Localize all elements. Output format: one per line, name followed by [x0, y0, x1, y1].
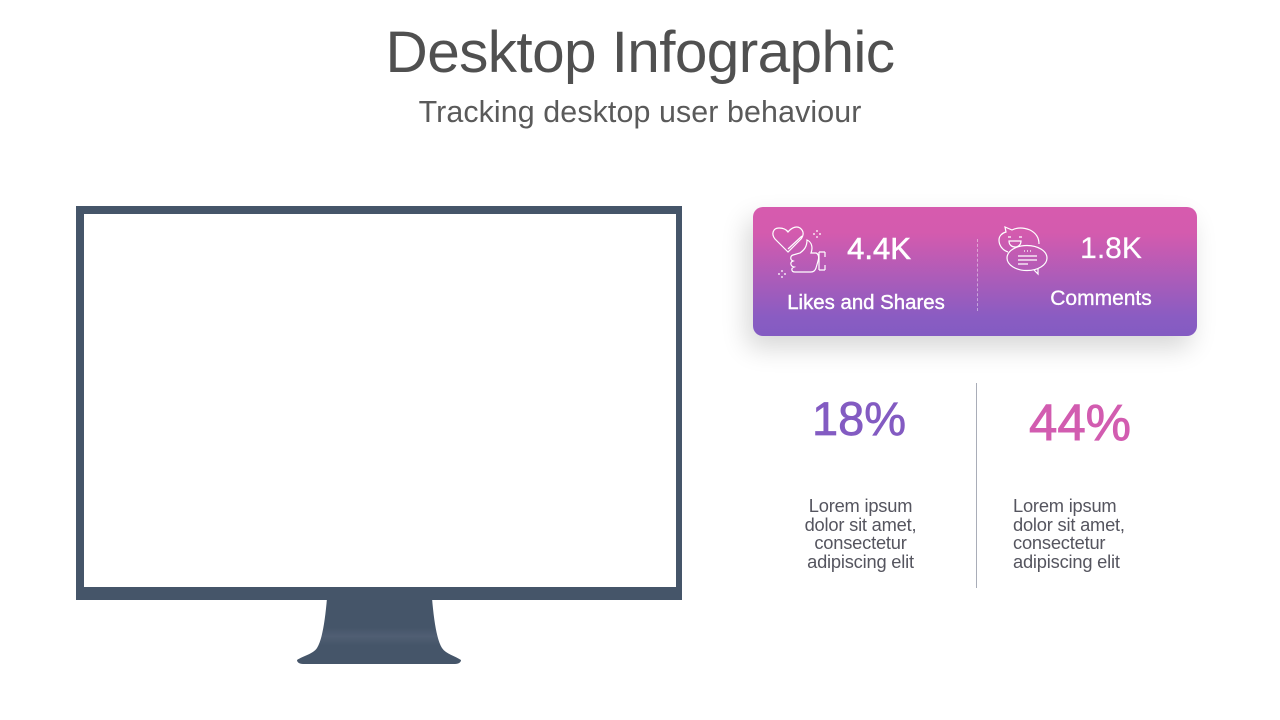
- stat: 18%: 18%: [812, 392, 906, 445]
- label: Comments: Comments: [1050, 287, 1152, 310]
- text block: left: dolor sit amet,: [805, 514, 916, 534]
- text block: right: consectetur: [1013, 532, 1105, 553]
- panel: social stats: [753, 207, 1197, 336]
- icon: heart and thumbs up: [772, 226, 826, 278]
- text block: right: adipiscing elit: [1013, 550, 1120, 572]
- vertical divider: [976, 383, 977, 588]
- text block: left: consectetur: [814, 532, 907, 553]
- text block: left: [805, 495, 916, 572]
- label: Likes and Shares: Likes and Shares: [787, 292, 945, 314]
- divider: [977, 239, 978, 311]
- title: Desktop Infographic: [386, 20, 894, 85]
- text block: right: [1013, 495, 1125, 572]
- text block: right: dolor sit amet,: [1013, 514, 1125, 534]
- stat: 4.4K: 4.4K: [847, 231, 911, 266]
- subtitle: Tracking desktop user behaviour: [419, 95, 861, 129]
- text block: left: adipiscing elit: [807, 550, 914, 572]
- monitor illustration: [76, 206, 682, 664]
- icon: speech bubbles: [998, 226, 1048, 276]
- text block: left: Lorem ipsum: [809, 495, 912, 516]
- stat: 1.8K: 1.8K: [1080, 232, 1142, 265]
- monitor stand: [297, 598, 461, 664]
- text block: right: Lorem ipsum: [1013, 495, 1116, 516]
- monitor frame: [76, 206, 682, 600]
- stat: 44%: 44%: [1029, 394, 1131, 451]
